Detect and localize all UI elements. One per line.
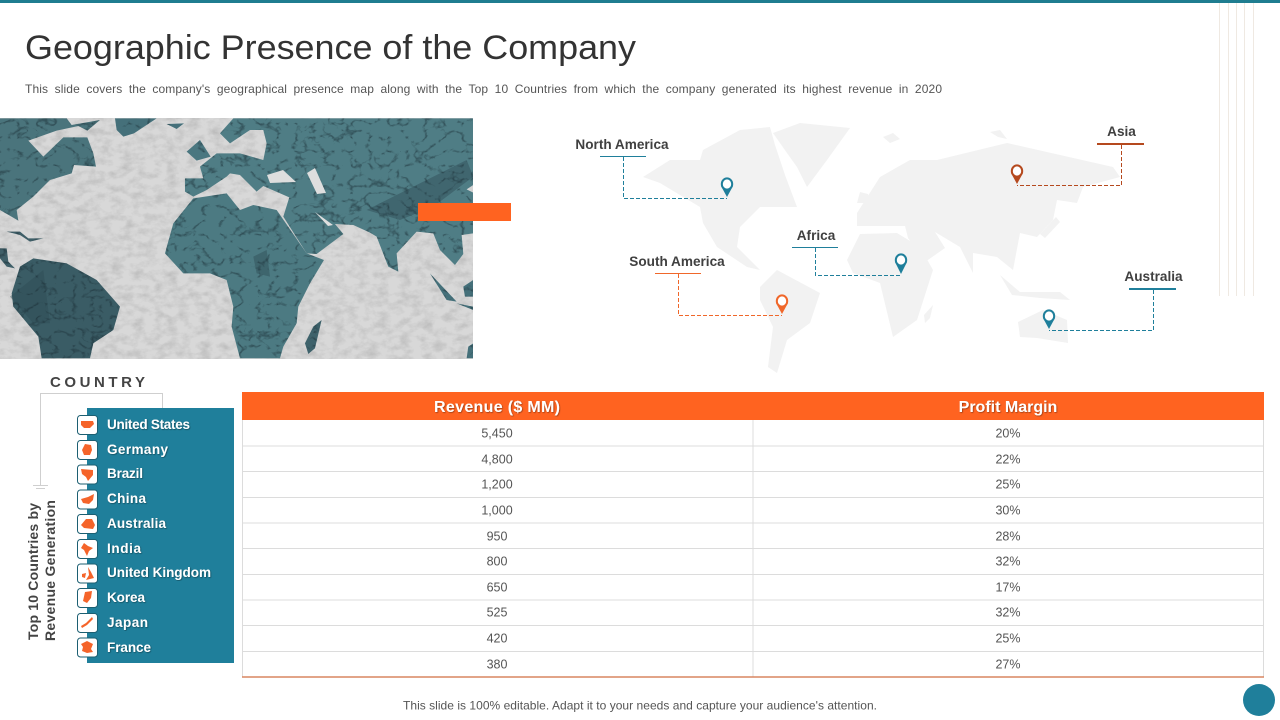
land: Eurasia [185,118,473,272]
land: Central America [0,232,43,268]
callout: Asia [1011,124,1144,186]
revenue column [481,426,513,672]
profit margin column: 17% [995,580,1021,594]
country: United States: United States [107,417,190,432]
profit margin column: 20% [995,426,1021,440]
country: United Kingdom: United Kingdom [107,565,211,580]
table [242,392,1264,677]
profit margin column: 32% [995,554,1021,568]
country: France [78,638,151,657]
land: Iceland [167,123,184,129]
pin: Australia [1043,310,1055,329]
revenue column: 4,800 [481,452,513,466]
land: South America [12,258,120,358]
inland seas [267,168,333,226]
dark mountains band [10,160,473,300]
country: Japan: Japan [107,615,148,630]
revenue column: 420 [487,632,507,646]
country: Korea [78,588,145,608]
country: Brazil [78,465,143,484]
footer note: This slide is 100% editable. Adapt it to your needs and capture your audience's attention. [403,698,877,712]
pin: North America [721,178,733,197]
panel: country list [78,408,234,663]
Greenland [773,123,850,187]
country: United States [78,416,190,434]
paper crease texture [0,118,473,359]
country: Australia: Australia [107,516,166,531]
profit margin column: 25% [995,478,1021,492]
revenue column: 5,450 [481,426,513,440]
title: Geographic Presence of the Company [25,29,636,67]
subtitle: This slide covers the company's geographical presence map along with the Top 10 Countries from which the company generated its highest revenue in 2020 [25,82,942,96]
revenue column: 525 [487,606,507,620]
UK [857,192,870,203]
bracket connector [33,394,162,488]
country: Japan [78,614,148,632]
rotated side label: Top 10 Countries by [25,503,41,640]
country: Germany: Germany [107,442,168,457]
profit margin column: 30% [995,504,1021,518]
decorative vertical stripes [1220,3,1254,296]
country: Germany [78,440,168,460]
table header [242,392,1264,420]
country: Australia [78,514,166,534]
pin: South America [776,295,788,314]
revenue column: 950 [487,530,507,544]
pin: Africa [895,254,907,274]
profit margin column [995,426,1021,672]
light world map [643,123,1120,373]
Australia [1018,310,1068,343]
callout: Australia [1043,269,1183,330]
table header: Revenue ($ MM) [434,399,560,416]
callout: Africa [792,228,907,276]
land: Africa [165,193,324,358]
orange accent bar [418,203,511,221]
heading: country: COUNTRY [50,374,145,391]
top accent bar [0,0,1280,3]
callout: North America: North America [575,137,669,152]
land: Greenland [115,118,157,137]
North America [643,127,797,270]
Africa [847,233,933,337]
profit margin column: 22% [995,452,1021,466]
pin: Asia [1011,165,1023,184]
land: Madagascar [305,320,322,354]
country: China [78,490,146,509]
callout: Australia: Australia [1124,269,1183,284]
callout: South America: South America [629,254,725,269]
callout: Asia: Asia [1107,124,1136,139]
callout: South America [629,254,788,316]
revenue column: 650 [487,580,507,594]
South America [760,270,820,373]
country: India: India [107,541,141,556]
country: France: France [107,640,151,655]
Indonesia [1000,275,1070,300]
Arctic islands [883,130,1007,143]
revenue column: 800 [487,554,507,568]
callout: Africa: Africa [797,228,836,243]
country: Korea: Korea [107,590,145,605]
callout: North America [575,137,733,198]
country: United Kingdom [78,564,211,583]
revenue column: 380 [487,658,507,672]
rotated side label [25,500,58,641]
photo: paper world map [0,118,473,359]
land: North America [0,118,100,221]
country: China: China [107,491,146,506]
revenue column: 1,200 [481,478,513,492]
country: Brazil: Brazil [107,466,143,481]
land: Indonesia [430,273,473,358]
corner circle [1243,684,1275,716]
rotated side label: Revenue Generation [42,500,58,641]
profit margin column: 28% [995,530,1021,544]
Madagascar [924,305,933,323]
country: India [78,540,141,558]
revenue column: 1,000 [481,504,513,518]
Eurasia [857,143,1120,273]
table header: Profit Margin [959,399,1057,416]
land: UK [187,140,211,161]
profit margin column: 32% [995,606,1021,620]
Japan [1040,217,1060,238]
profit margin column: 27% [995,658,1021,672]
profit margin column: 25% [995,632,1021,646]
